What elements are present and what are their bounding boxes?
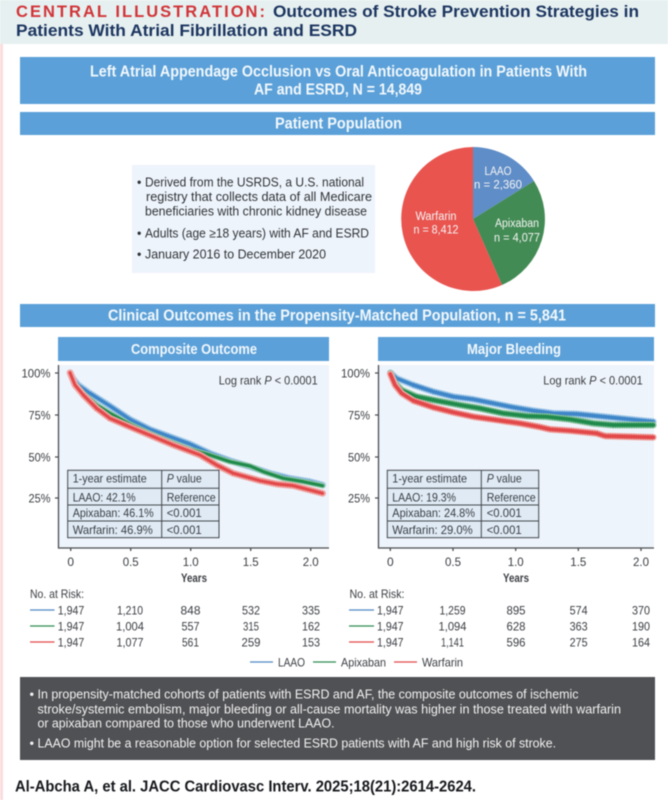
numbers at risk: composite outcome: 1,947 bbox=[58, 604, 85, 618]
pie chart: patient population: n = 8,412 bbox=[414, 224, 458, 236]
numbers at risk: composite outcome: 335 bbox=[302, 604, 320, 618]
patient population criteria text block: January 2016 to December 2020 bbox=[145, 248, 326, 262]
major bleeding log rank p value: Log rank P < 0.0001 bbox=[543, 374, 643, 388]
legend: Apixaban bbox=[341, 656, 386, 670]
major bleeding axes: 75% bbox=[348, 408, 370, 422]
numbers at risk: composite outcome: 1,077 bbox=[116, 636, 144, 650]
major bleeding axes: 25% bbox=[348, 492, 370, 506]
numbers at risk: composite outcome: No. at Risk: bbox=[30, 587, 84, 601]
key takeaways panel: • bbox=[30, 686, 34, 702]
composite outcome heading bbox=[58, 337, 329, 361]
citation: Al-Abcha A, et al. JACC Cardiovasc Interv. 2025;18(21):2614-2624. bbox=[15, 778, 476, 796]
numbers at risk: major bleeding: 1,947 bbox=[377, 636, 404, 650]
patient population criteria text block: registry that collects data of all Medicare bbox=[146, 190, 372, 204]
legend: LAAO bbox=[278, 656, 305, 670]
composite 1-year estimate table: <0.001 bbox=[167, 523, 202, 537]
key takeaways panel: or apixaban compared to those who underwent LAAO. bbox=[38, 716, 334, 730]
numbers at risk: major bleeding: 275 bbox=[570, 636, 588, 650]
composite outcome axes: 25% bbox=[28, 492, 51, 506]
numbers at risk: composite outcome: 1,947 bbox=[58, 620, 85, 634]
composite 1-year estimate table: <0.001 bbox=[167, 506, 202, 520]
key takeaways panel: • bbox=[30, 736, 34, 750]
key takeaways panel bbox=[20, 677, 655, 760]
pie chart: patient population: Warfarin bbox=[416, 211, 456, 223]
major bleeding 1-year estimate table: Apixaban: 24.8% bbox=[392, 506, 475, 520]
key takeaways panel: LAAO might be a reasonable option for selected ESRD patients with AF and high risk of stroke. bbox=[38, 736, 556, 750]
patient population criteria text block: • bbox=[137, 176, 141, 190]
numbers at risk: composite outcome: 848 bbox=[180, 604, 201, 618]
numbers at risk: major bleeding: 1,947 bbox=[377, 620, 404, 634]
clinical outcomes heading: Clinical Outcomes in the Propensity-Matched Population, n = 5,841 bbox=[108, 308, 566, 324]
composite log rank p value: Log rank P < 0.0001 bbox=[219, 374, 318, 388]
numbers at risk: composite outcome: 1,210 bbox=[117, 604, 143, 618]
major bleeding axes: 0 bbox=[387, 555, 394, 569]
patient population criteria text block: Adults (age ≥18 years) with AF and ESRD bbox=[145, 226, 369, 240]
numbers at risk: composite outcome: 557 bbox=[182, 620, 200, 634]
composite outcome axes: 2.0 bbox=[303, 555, 319, 569]
numbers at risk: composite outcome: 315 bbox=[243, 620, 259, 634]
key takeaways panel: In propensity-matched cohorts of patients with ESRD and AF, the composite outcomes of ischemic bbox=[38, 686, 579, 702]
composite outcome axes: Years bbox=[181, 573, 207, 585]
numbers at risk: composite outcome: 259 bbox=[242, 636, 261, 650]
panel: composite outcome bbox=[22, 337, 329, 585]
composite outcome axes: 50% bbox=[28, 450, 51, 464]
major bleeding survival curves bbox=[390, 373, 653, 437]
pie chart: patient population: Apixaban bbox=[495, 218, 539, 230]
major bleeding axes bbox=[341, 365, 654, 585]
numbers at risk: major bleeding: 895 bbox=[506, 604, 526, 618]
major bleeding 1-year estimate table: Warfarin: 29.0% bbox=[392, 523, 473, 537]
major bleeding 1-year estimate table: Reference bbox=[487, 490, 536, 504]
numbers at risk: composite outcome bbox=[30, 587, 320, 650]
major bleeding axes: 0.5 bbox=[445, 555, 461, 569]
pie chart: patient population: n = 2,360 bbox=[474, 180, 522, 192]
composite outcome axes: 100% bbox=[22, 366, 51, 380]
major bleeding axes: 1.5 bbox=[570, 555, 587, 569]
legend bbox=[250, 656, 463, 670]
composite outcome heading: Composite Outcome bbox=[131, 342, 257, 358]
composite 1-year estimate table: Reference bbox=[167, 490, 216, 504]
composite outcome axes: 75% bbox=[28, 408, 51, 422]
title banner bbox=[0, 0, 668, 44]
patient population criteria text block: Derived from the USRDS, a U.S. national bbox=[145, 176, 364, 190]
major bleeding axes: 100% bbox=[341, 366, 370, 380]
numbers at risk: composite outcome: 532 bbox=[242, 604, 260, 618]
major bleeding 1-year estimate table: <0.001 bbox=[487, 506, 522, 520]
composite outcome axes: 1.5 bbox=[243, 555, 259, 569]
major bleeding axes: 50% bbox=[348, 450, 370, 464]
title banner: Outcomes of Stroke Prevention Strategies in bbox=[273, 3, 639, 21]
pie chart: patient population: n = 4,077 bbox=[494, 232, 540, 244]
numbers at risk: major bleeding: 363 bbox=[570, 620, 588, 634]
clinical outcomes heading bbox=[20, 304, 655, 327]
numbers at risk: composite outcome: 153 bbox=[302, 636, 320, 650]
composite 1-year estimate table bbox=[68, 470, 219, 538]
pie chart: patient population: LAAO bbox=[484, 166, 512, 178]
major bleeding 1-year estimate table: <0.001 bbox=[487, 523, 522, 537]
panel: major bleeding bbox=[341, 337, 654, 585]
major bleeding 1-year estimate table: 1-year estimate bbox=[392, 472, 467, 486]
patient population heading bbox=[20, 112, 655, 135]
pie chart: patient population bbox=[401, 147, 545, 291]
composite 1-year estimate table: Warfarin: 46.9% bbox=[73, 523, 153, 537]
major bleeding 1-year estimate table: P value bbox=[487, 472, 522, 486]
composite outcome survival curves bbox=[70, 373, 323, 493]
composite outcome axes: 1.0 bbox=[183, 555, 199, 569]
numbers at risk: major bleeding: 1,947 bbox=[377, 604, 404, 618]
study heading banner: Left Atrial Appendage Occlusion vs Oral Anticoagulation in Patients With bbox=[90, 64, 587, 80]
study heading banner bbox=[20, 57, 655, 104]
numbers at risk: major bleeding: 190 bbox=[632, 620, 650, 634]
numbers at risk: major bleeding bbox=[349, 587, 650, 650]
title banner: Patients With Atrial Fibrillation and ESRD bbox=[16, 22, 357, 40]
patient population criteria text block: beneficiaries with chronic kidney disease bbox=[145, 204, 367, 218]
legend: Warfarin bbox=[422, 656, 463, 670]
patient population criteria text block: • bbox=[137, 248, 141, 262]
numbers at risk: composite outcome: 1,004 bbox=[116, 620, 144, 634]
major bleeding heading: Major Bleeding bbox=[467, 342, 561, 358]
numbers at risk: major bleeding: 164 bbox=[632, 636, 650, 650]
major bleeding heading bbox=[378, 337, 654, 361]
patient population criteria text block bbox=[132, 165, 375, 273]
study heading banner: AF and ESRD, N = 14,849 bbox=[254, 82, 422, 98]
composite 1-year estimate table: LAAO: 42.1% bbox=[73, 490, 136, 504]
patient population heading: Patient Population bbox=[275, 116, 402, 132]
numbers at risk: major bleeding: 1,259 bbox=[440, 604, 466, 618]
major bleeding 1-year estimate table: LAAO: 19.3% bbox=[392, 490, 456, 504]
numbers at risk: major bleeding: 1,141 bbox=[441, 636, 464, 650]
composite 1-year estimate table: Apixaban: 46.1% bbox=[73, 506, 154, 520]
composite outcome axes bbox=[22, 365, 329, 585]
numbers at risk: major bleeding: 370 bbox=[632, 604, 650, 618]
major bleeding 1-year estimate table bbox=[387, 470, 539, 538]
numbers at risk: composite outcome: 1,947 bbox=[58, 636, 85, 650]
numbers at risk: major bleeding: 628 bbox=[506, 620, 526, 634]
numbers at risk: composite outcome: 162 bbox=[302, 620, 320, 634]
major bleeding axes: 2.0 bbox=[633, 555, 649, 569]
numbers at risk: major bleeding: 574 bbox=[570, 604, 588, 618]
composite 1-year estimate table: P value bbox=[167, 472, 202, 486]
major bleeding axes: 1.0 bbox=[508, 555, 524, 569]
patient population criteria text block: • bbox=[137, 226, 141, 240]
numbers at risk: major bleeding: 1,094 bbox=[438, 620, 467, 634]
composite outcome axes: 0.5 bbox=[123, 555, 139, 569]
numbers at risk: composite outcome: 561 bbox=[182, 636, 199, 650]
title banner: CENTRAL ILLUSTRATION: bbox=[16, 3, 265, 21]
numbers at risk: major bleeding: 596 bbox=[506, 636, 526, 650]
key takeaways panel: stroke/systemic embolism, major bleeding or all-cause mortality was higher in those treated with warfarin bbox=[38, 702, 621, 716]
composite 1-year estimate table: 1-year estimate bbox=[73, 472, 147, 486]
numbers at risk: major bleeding: No. at Risk: bbox=[350, 587, 404, 601]
composite outcome axes: 0 bbox=[67, 555, 74, 569]
major bleeding axes: Years bbox=[503, 573, 529, 585]
